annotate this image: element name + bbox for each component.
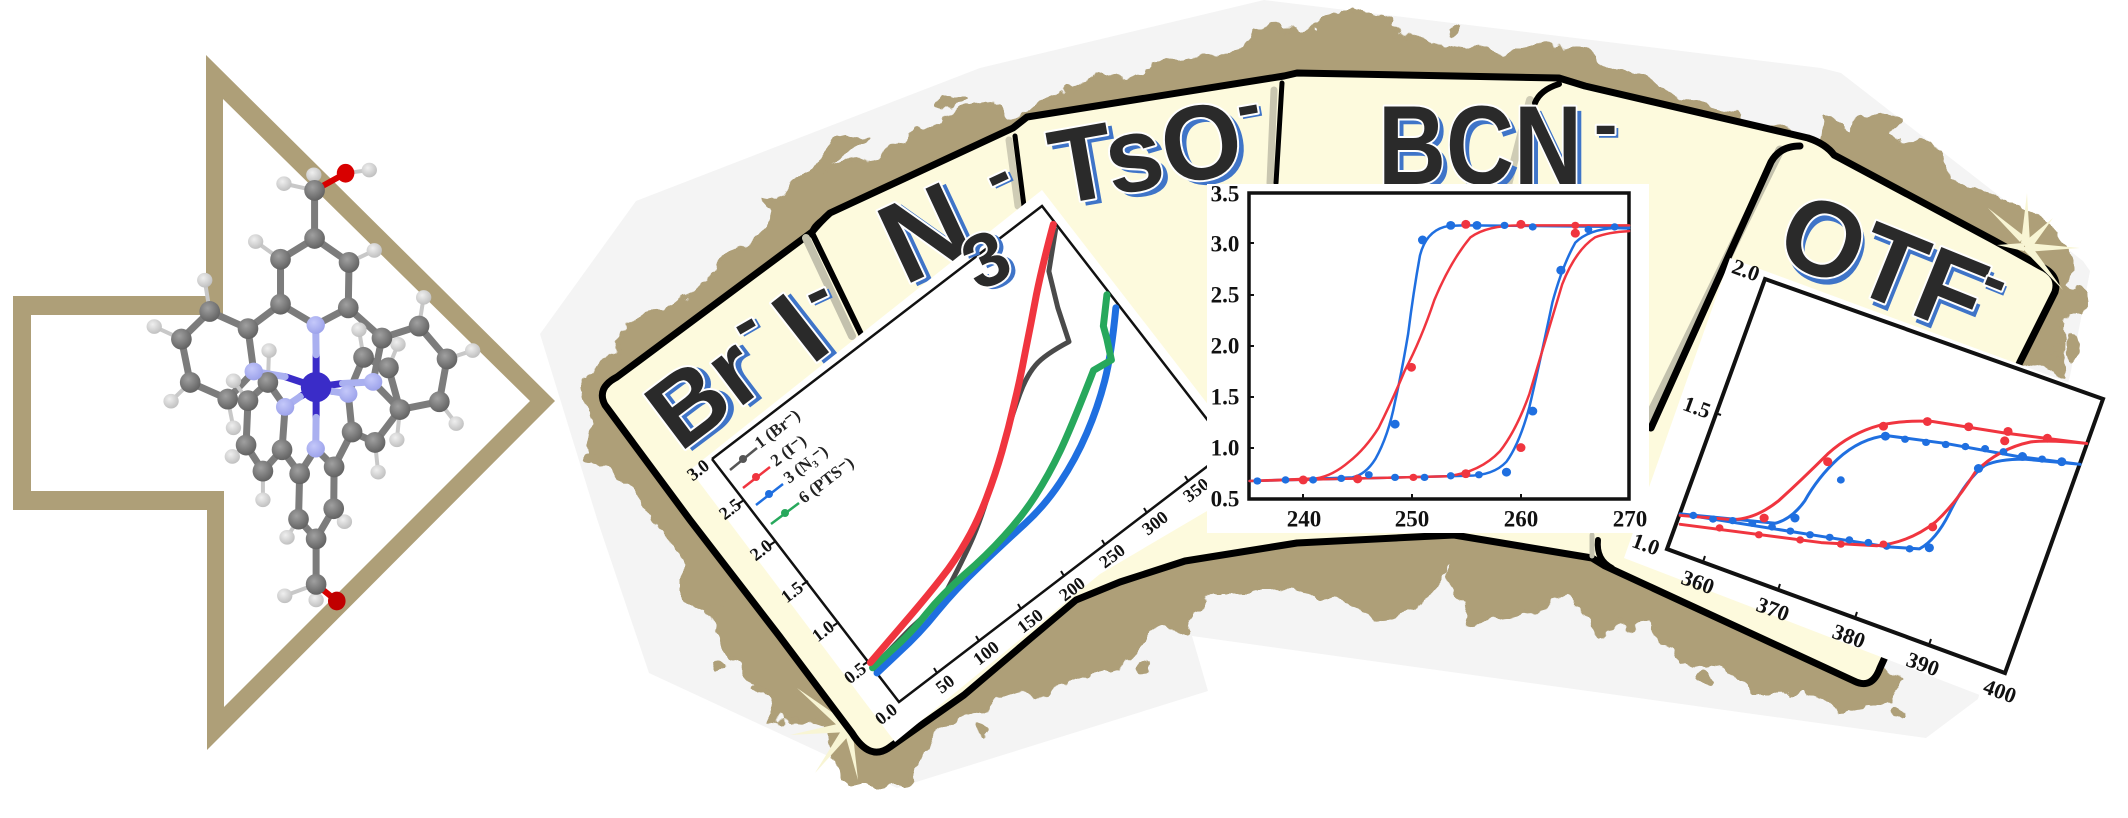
plot 2 red points [1299, 220, 1580, 484]
plot 2 x-axis labels: 250 [1395, 506, 1429, 532]
plot 1 data curves [870, 224, 1116, 673]
label: minus on OTF: - [1971, 238, 2022, 319]
pale grey backdrop behind cards [540, 0, 2090, 788]
panel: plot 2 hysteresis loop [1207, 182, 1649, 533]
plot 2 white background [1207, 184, 1649, 533]
plot 3 blue points [1689, 432, 2066, 552]
plot 1 white background [690, 190, 1230, 742]
plot 2 y-axis labels [1211, 182, 1239, 512]
plot 2 x-axis labels: 240 [1287, 506, 1321, 532]
plot 1 legend [730, 406, 857, 524]
label: minus on I: - [788, 250, 842, 331]
molecule: metal complex structure [147, 163, 480, 610]
plot 2 y-axis labels: 0.5 [1211, 486, 1239, 512]
molecule bonds [154, 170, 473, 601]
label: minus on I: - [792, 252, 846, 332]
plot 3 white background [1624, 258, 2108, 702]
label: N3-: N [860, 158, 990, 309]
label: minus on Br: - [714, 282, 773, 361]
plot 3 red curves [1680, 421, 2087, 546]
label: TsO-: TsO [1046, 82, 1257, 232]
plot 3 y-axis labels [1629, 254, 1763, 560]
label: Br-: Br [626, 314, 782, 471]
curve: 3 N3 blue [877, 308, 1116, 673]
splatter droplets [581, 24, 2085, 737]
plot 1 y-axis labels: 1.5 [777, 577, 807, 607]
label: minus on N3: - [969, 133, 1023, 214]
plot 2 x-axis labels: 270 [1613, 506, 1647, 532]
curve: 1 Br black [873, 230, 1069, 668]
plot 3 axes box [1667, 279, 2103, 673]
label: OTF-: OTF [1763, 168, 2003, 358]
plot 1 legend: 3 (N₃⁻) [780, 441, 831, 487]
molecule oxygen atoms [328, 164, 354, 610]
curve: 6 PTS green [873, 295, 1111, 668]
panel: plot 3 hysteresis loop [1624, 254, 2108, 708]
plot 3 ticks [1703, 413, 1931, 645]
label: minus on TsO: - [1233, 66, 1269, 147]
molecule nitrogen atoms [245, 316, 382, 458]
plot 3 data [1680, 417, 2087, 552]
plot 1 x-axis labels [932, 474, 1213, 697]
plot 2 blue points [1253, 221, 1619, 485]
plot 1 x-axis labels: 300 [1138, 507, 1172, 539]
label: minus on TsO: - [1229, 64, 1266, 145]
label: N3-: N [867, 160, 996, 311]
plot 3 y-axis labels: 1.5 [1680, 391, 1714, 423]
plot 1 x-axis labels: 150 [1013, 605, 1047, 637]
sparkle: lower left [790, 688, 858, 780]
plot 2 y-axis labels: 2.5 [1211, 282, 1239, 308]
plot 1 y-axis labels [683, 455, 901, 729]
label: OTF-: OTF [1766, 175, 2006, 365]
plot 1 x-axis labels: 50 [932, 671, 958, 697]
molecule carbon atoms [171, 180, 457, 595]
plot 2 y-axis labels: 2.0 [1211, 334, 1239, 358]
label: minus on Br: - [718, 283, 777, 362]
plot 1 y-axis labels: 2.0 [746, 535, 776, 565]
plot 1 x-axis labels: 250 [1095, 540, 1129, 572]
plot 2 blue curves [1249, 225, 1629, 481]
molecule central metal atom [301, 372, 331, 402]
plot 1 legend: 6 (PTS⁻) [795, 453, 857, 507]
label: subscript 3 of N3: 3 [949, 213, 1024, 307]
plot 1 y-axis labels: 1.0 [808, 616, 838, 646]
plot 3 x-axis labels: 360 [1678, 565, 1718, 599]
plot 1 x-axis labels: 100 [969, 637, 1003, 669]
plot 1 y-axis labels: 2.5 [715, 494, 745, 524]
label: TsO-: TsO [1041, 78, 1251, 228]
plot 1 legend: 2 (I⁻) [767, 431, 810, 470]
plot 2 x-axis labels: 260 [1504, 506, 1538, 532]
plot 3 y-axis labels: 1.0 [1629, 528, 1663, 560]
plot 3 x-axis labels: 400 [1980, 674, 2020, 708]
label: Br-: Br [633, 315, 789, 472]
plot 1 ticks [738, 476, 1188, 673]
arrow outline [13, 55, 555, 750]
plot 3 x-axis labels: 390 [1903, 647, 1943, 681]
plot 2 red curves [1249, 225, 1629, 481]
label: I-: I [751, 271, 849, 384]
plot 3 y-axis labels: 2.0 [1729, 254, 1763, 286]
plot 1 legend: 1 (Br⁻) [751, 406, 804, 452]
plot 1 y-axis labels: 0.5 [840, 658, 870, 688]
label: minus on BCN: - [1597, 88, 1620, 166]
plot 2 x-axis labels [1287, 506, 1647, 532]
plot 2 y-axis labels: 1.0 [1211, 436, 1239, 460]
molecule hydrogen atoms [147, 163, 480, 607]
panel: plot 1 absorption curves [683, 190, 1230, 742]
plot 2 y-axis labels: 3.5 [1211, 182, 1239, 206]
label: minus on BCN: - [1594, 85, 1617, 163]
label: minus on OTF: - [1973, 241, 2024, 323]
plot 3 red points [1716, 417, 2052, 548]
card divider lines [806, 83, 1800, 568]
brown splatter behind cards [578, 8, 2085, 788]
plot 3 blue curves [1680, 436, 2080, 549]
label: BCN-: BCN [1378, 83, 1582, 208]
curve: 2 I red [870, 224, 1053, 663]
plot 2 axes box [1249, 193, 1629, 499]
plot 3 x-axis labels: 370 [1753, 592, 1793, 626]
card stack outline [602, 73, 2056, 752]
plot 2 ticks [1249, 243, 1521, 499]
plot 1 x-axis labels: 350 [1179, 474, 1213, 506]
plot 2 data [1249, 220, 1629, 485]
plot 1 y-axis labels: 3.0 [683, 455, 713, 485]
label: I-: I [758, 271, 856, 385]
plot 1 y-axis labels: 0.0 [871, 699, 901, 729]
plot 3 x-axis labels: 380 [1829, 619, 1869, 653]
plot 1 x-axis labels: 200 [1055, 573, 1089, 605]
label: minus on N3: - [973, 135, 1027, 215]
label: subscript 3 of N3: 3 [955, 214, 1029, 309]
label: BCN-: BCN [1383, 88, 1587, 213]
plot 3 x-axis labels [1678, 565, 2020, 708]
plot 2 y-axis labels: 3.0 [1211, 232, 1239, 256]
sparkle: upper right [1988, 193, 2080, 290]
plot 1 axes [712, 206, 1230, 702]
plot 2 y-axis labels: 1.5 [1211, 384, 1239, 410]
